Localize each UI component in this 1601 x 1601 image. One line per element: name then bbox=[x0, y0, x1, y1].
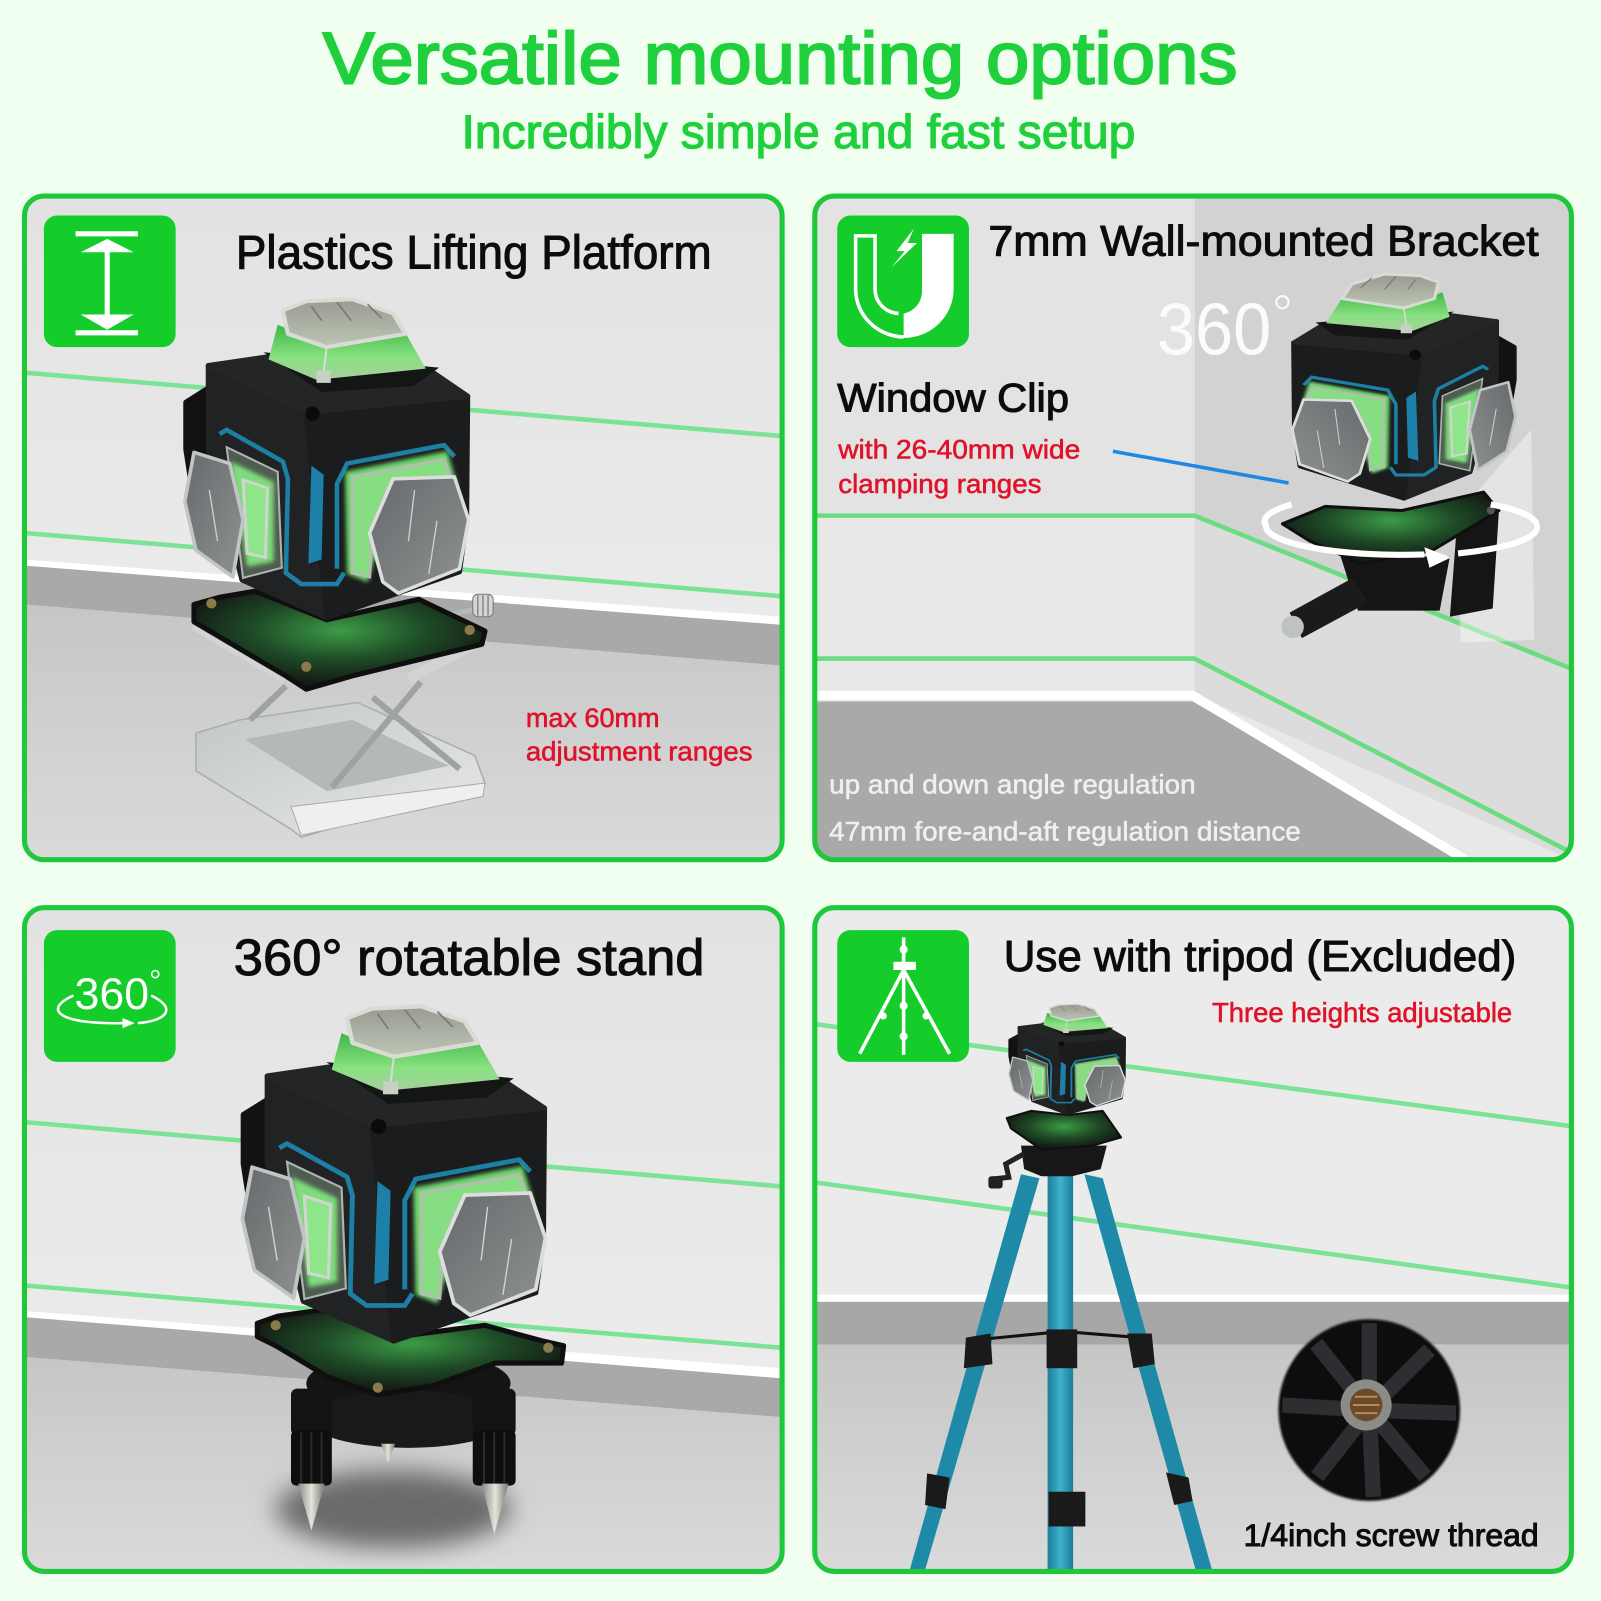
icon: 360 rotation bbox=[44, 930, 176, 1062]
icon: lift arrows bbox=[44, 215, 176, 347]
note: clamping range: clamping ranges bbox=[838, 469, 1041, 499]
note: clamping range bbox=[837, 434, 1080, 499]
tripod base bbox=[291, 1351, 516, 1535]
screw thread close-up bbox=[1278, 1319, 1460, 1501]
icon: 360 rotation: 360 bbox=[75, 968, 149, 1019]
laser level bbox=[1292, 274, 1515, 499]
subtitle: Incredibly simple and fast setup bbox=[462, 105, 1135, 158]
panel: wall-mounted bracket bbox=[815, 196, 1571, 860]
note: regulation bbox=[829, 769, 1301, 846]
blue pointer line bbox=[1113, 451, 1289, 483]
note: clamping range: with 26-40mm wide bbox=[837, 434, 1080, 464]
icon: tripod bbox=[837, 930, 969, 1062]
heading: 360° rotatable stand bbox=[234, 929, 705, 986]
transparent window pane bbox=[1460, 429, 1535, 643]
base plate bbox=[1282, 492, 1499, 564]
laser level bbox=[185, 299, 469, 618]
panel border bbox=[25, 908, 782, 1571]
base plate bbox=[1007, 1111, 1121, 1150]
note: adjustment range: max 60mm bbox=[526, 703, 660, 733]
icon: magnet bbox=[837, 215, 969, 347]
panel: plastics lifting platform bbox=[25, 196, 782, 860]
title: Versatile mounting options bbox=[323, 17, 1238, 100]
rotation arrow ring bbox=[1265, 504, 1537, 568]
360 degree label: 360 bbox=[1157, 287, 1271, 370]
window clip bracket bbox=[1281, 511, 1499, 638]
note: adjustment range: adjustment ranges bbox=[526, 737, 753, 767]
sub-heading: window clip: Window Clip bbox=[837, 376, 1069, 420]
laser level bbox=[242, 1006, 545, 1341]
base plate bbox=[194, 591, 485, 689]
panel: tripod bbox=[815, 908, 1571, 1578]
tripod bbox=[909, 1146, 1213, 1578]
note: adjustment range bbox=[526, 703, 753, 767]
panel border bbox=[815, 908, 1571, 1571]
heading: 7mm Wall-mounted Bracket bbox=[988, 217, 1539, 265]
panel border bbox=[25, 196, 782, 860]
lifting platform scissor stand bbox=[194, 625, 485, 837]
laser level bbox=[1009, 1004, 1125, 1114]
thumb screw bbox=[449, 594, 493, 617]
note: regulation: up and down angle regulation bbox=[829, 769, 1196, 799]
label: screw thread: 1/4inch screw thread bbox=[1244, 1517, 1539, 1553]
panel border bbox=[815, 196, 1571, 860]
note: heights: Three heights adjustable bbox=[1212, 997, 1512, 1028]
note: regulation: 47mm fore-and-aft regulation distance bbox=[829, 816, 1301, 846]
heading: Plastics Lifting Platform bbox=[236, 226, 712, 279]
heading: Use with tripod (Excluded) bbox=[1004, 932, 1516, 981]
panel: rotatable stand bbox=[25, 908, 782, 1571]
base plate bbox=[257, 1310, 564, 1395]
